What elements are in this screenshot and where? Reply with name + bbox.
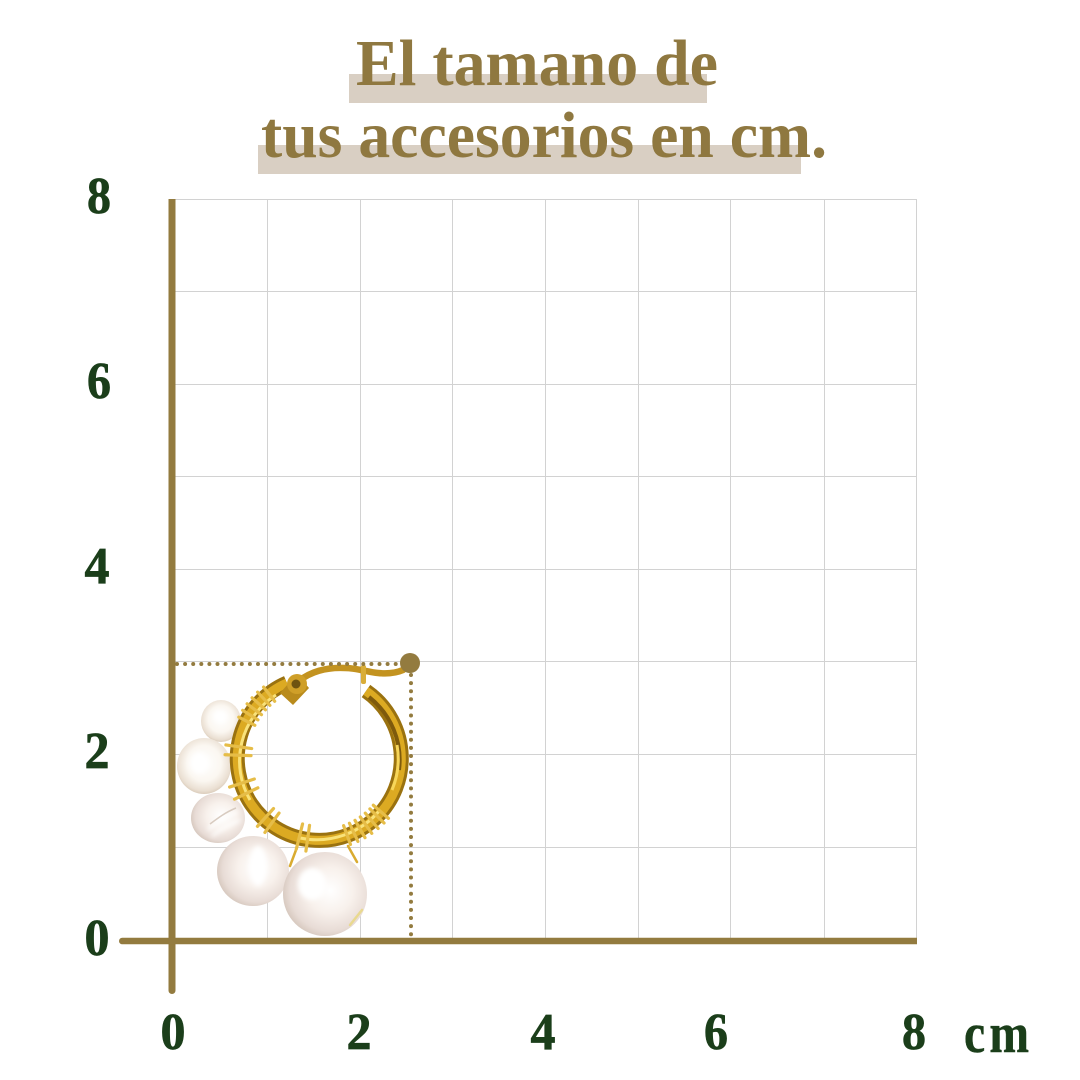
pearl pins (290, 846, 357, 866)
x axis labels: 8 (902, 1004, 926, 1061)
y axis labels: 8 (87, 168, 111, 225)
measure point (400, 653, 420, 673)
earring photo illustration (177, 665, 403, 936)
title (258, 27, 827, 174)
grid (172, 199, 917, 941)
hinge pin (292, 680, 300, 688)
title highlight line 2 (258, 145, 801, 174)
title highlight line 1 (349, 74, 707, 103)
x axis (119, 938, 917, 944)
title line 1: El tamano de (356, 27, 718, 100)
hoop (237, 683, 401, 840)
y axis labels: 6 (87, 353, 111, 410)
pearl 1 (201, 700, 241, 742)
horizontal dotted guide (177, 662, 402, 666)
hinge (287, 674, 307, 694)
wire wrap right (344, 805, 388, 844)
y axis labels: 4 (84, 538, 110, 595)
x axis labels: 0 (160, 1004, 186, 1061)
y axis labels: 0 (84, 910, 110, 967)
pearl 4 (217, 836, 289, 906)
y axis labels (84, 168, 111, 967)
hinge bracket (280, 674, 309, 705)
wire wrap left (225, 745, 310, 851)
pearl 5 (283, 852, 367, 936)
x axis labels (160, 1004, 926, 1061)
unit label: cm (964, 1004, 1033, 1065)
x axis labels: 4 (530, 1004, 556, 1061)
vertical dotted guide (409, 675, 413, 935)
y axis labels: 2 (84, 723, 110, 780)
x axis labels: 6 (704, 1004, 728, 1061)
title line 2: tus accesorios en cm. (261, 99, 827, 172)
pearl 2 (177, 738, 231, 794)
clasp loop (361, 665, 366, 684)
x axis labels: 2 (346, 1004, 372, 1061)
pearl 3 (191, 793, 245, 843)
wire wrap top (239, 687, 275, 725)
y axis (168, 199, 176, 994)
clasp (299, 668, 403, 681)
